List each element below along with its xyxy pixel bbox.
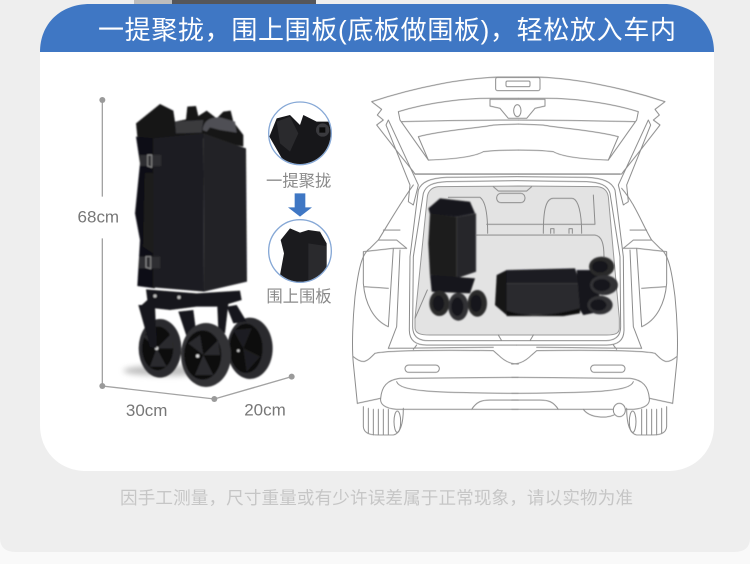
- inset: gathered close-up: [269, 102, 333, 167]
- diagram: folded wagon with dimensions: [78, 97, 333, 420]
- label: 20cm: 20cm: [244, 400, 286, 419]
- caption: 围上围板: 围上围板: [266, 288, 332, 306]
- bag front: [153, 133, 204, 292]
- wagon upright in trunk: [428, 198, 487, 321]
- seats: [497, 193, 525, 203]
- top contents: [136, 104, 243, 147]
- frame: [140, 289, 242, 333]
- rear wheel: [227, 318, 273, 379]
- footnote: 因手工测量，尺寸重量或有少许误差属于正常现象，请以实物为准: [120, 488, 633, 508]
- diagram: car rear with wagons in trunk: [353, 77, 677, 435]
- front left wheel: [139, 319, 181, 378]
- caption: 一提聚拢: 一提聚拢: [266, 173, 331, 191]
- heading banner: [40, 4, 714, 52]
- dimension lines: [99, 97, 295, 402]
- straps: [139, 155, 161, 268]
- photo strip above header: [134, 0, 316, 5]
- floor shadow: [123, 365, 210, 376]
- label: 68cm: 68cm: [78, 208, 119, 227]
- trunk floor and interior: [415, 186, 619, 335]
- front middle wheel: [181, 323, 231, 387]
- heading text: 一提聚拢，围上围板(底板做围板)，轻松放入车内: [98, 15, 676, 45]
- inset: panel raised close-up: [269, 220, 331, 283]
- panel: white content card: [40, 52, 714, 471]
- forks: [138, 305, 199, 357]
- bag side: [203, 133, 247, 292]
- wagon photo: [135, 104, 273, 387]
- label: 30cm: 30cm: [126, 401, 167, 420]
- bag left folds: [135, 137, 155, 288]
- arrow: [288, 193, 312, 217]
- car outline: [353, 77, 677, 435]
- wagon lying in trunk: [495, 257, 618, 316]
